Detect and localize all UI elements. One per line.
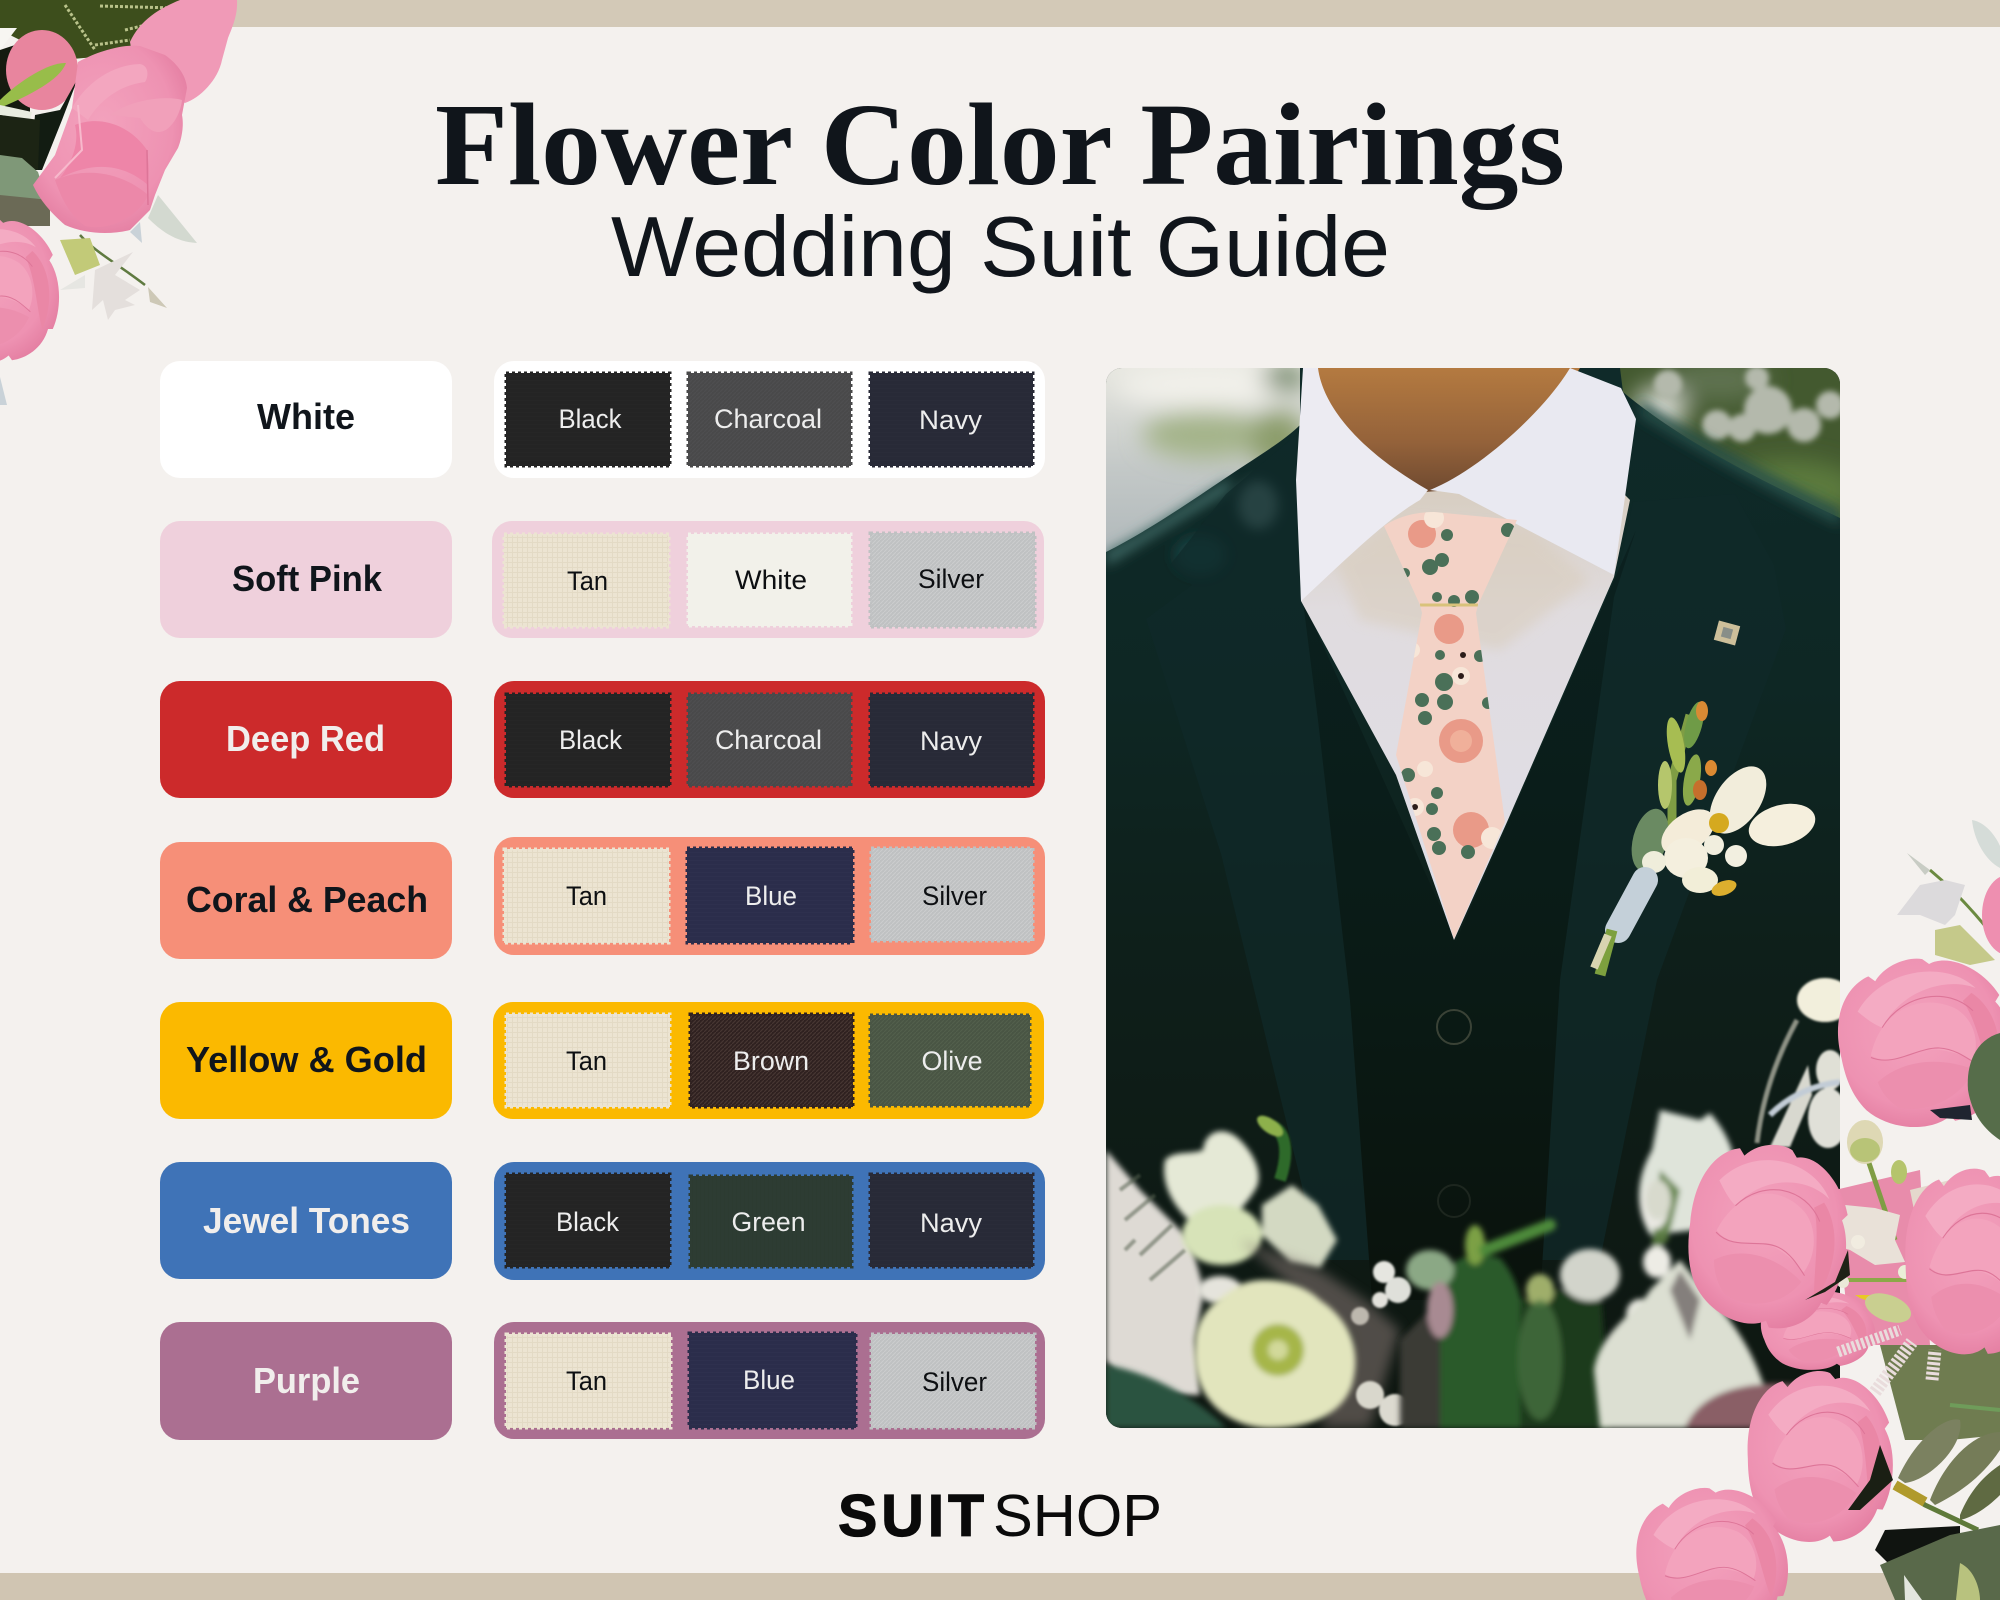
- swatch: White: [688, 534, 851, 626]
- left collar: [1296, 368, 1428, 601]
- dark spiky sepal: [30, 78, 78, 170]
- swatch: Tan: Tan: [566, 881, 607, 911]
- label pill: Purple: Purple: [253, 1360, 360, 1401]
- pink backing behind center blossoms: [1835, 1170, 1930, 1345]
- buds: [1847, 1120, 1907, 1240]
- swatch: Navy: [870, 373, 1033, 466]
- bottom band: [0, 1573, 2000, 1600]
- swatch: Olive: Olive: [922, 1046, 982, 1076]
- jacket: [1106, 368, 1840, 1428]
- photo background: blurred sky and greenery: [1106, 368, 1840, 552]
- label pill: Purple: [160, 1322, 452, 1440]
- swatch: Charcoal: Charcoal: [715, 725, 822, 755]
- swatch: Black: [506, 1174, 670, 1267]
- logo: SUITSHOP: SHOP: [993, 1483, 1162, 1549]
- swatch: Navy: Navy: [920, 1208, 983, 1238]
- swatch: Silver: Silver: [918, 564, 984, 594]
- swatch: Silver: Silver: [922, 881, 987, 911]
- green bud leaf: [0, 63, 66, 108]
- neck: [1312, 368, 1580, 492]
- green foliage center: [1400, 1225, 1620, 1428]
- top fern and greens: [0, 0, 190, 150]
- white fern sprigs: [1838, 1330, 1935, 1392]
- swatch: Navy: [870, 694, 1033, 786]
- logo: SUITSHOP: [838, 1483, 1162, 1549]
- row: Jewel Tones: [160, 1162, 1045, 1280]
- row: Deep Red: [160, 681, 1045, 798]
- sunlit left shoulder highlights: [1106, 400, 1840, 575]
- label pill: Soft Pink: [160, 521, 452, 638]
- row: Soft Pink: [160, 521, 1044, 638]
- boutonniere: [1594, 700, 1820, 975]
- swatch: Tan: [504, 534, 669, 627]
- grey-green leaf: [0, 155, 50, 226]
- label pill: Coral and Peach: Coral & Peach: [186, 879, 428, 920]
- label pill: White: [160, 361, 452, 478]
- left peony: [0, 217, 59, 363]
- swatch: Silver: [871, 1334, 1035, 1428]
- swatch: Brown: Brown: [733, 1046, 809, 1076]
- label pill: Soft Pink: Soft Pink: [232, 558, 383, 599]
- big bottom leaf: [1875, 1525, 2000, 1600]
- swatch: Tan: Tan: [567, 566, 608, 596]
- small white flowers: [1351, 1261, 1411, 1426]
- bud D: [1755, 1286, 1882, 1374]
- swatch panel: Yellow and Gold: [493, 1002, 1044, 1119]
- jacket buttons: [1437, 1010, 1471, 1217]
- floral tie: [1380, 505, 1520, 945]
- large pale green flower: [1195, 1280, 1355, 1428]
- swatch: Charcoal: Charcoal: [714, 404, 822, 434]
- lapel pin: [1714, 620, 1740, 646]
- dark leaf bottom left: [1106, 1365, 1226, 1428]
- white blossoms upper right: [1897, 853, 2000, 965]
- photo: groom in dark green suit with floral tie and bouquet: [1106, 358, 1860, 1428]
- swatch: Green: [690, 1176, 852, 1267]
- white stem piece: [0, 105, 32, 120]
- label pill: Jewel Tones: Jewel Tones: [203, 1200, 410, 1241]
- peony E: [1741, 1364, 1900, 1550]
- flowers: right-side peony cascade: [1631, 820, 2000, 1600]
- small white blossoms: [60, 235, 167, 320]
- label pill: Deep Red: Deep Red: [226, 718, 385, 759]
- lower buds and leaves: [1895, 1405, 2000, 1530]
- dark sepal: [1805, 1250, 1850, 1300]
- swatch: Navy: [870, 1174, 1033, 1267]
- swatch: Tan: [506, 1014, 670, 1107]
- swatch: White: White: [735, 565, 807, 595]
- pink-grey sprays between flowers: [1240, 1240, 1400, 1428]
- swatch: Black: [506, 694, 670, 786]
- peony A: [1832, 951, 2000, 1133]
- flowers: top-left peony cluster: [0, 0, 237, 405]
- dark sepal on peony E: [1848, 1445, 1893, 1510]
- peony F: [1631, 1481, 1794, 1600]
- swatch panel: White: [494, 361, 1045, 478]
- label pill: White: White: [257, 396, 355, 437]
- olive mass below blossoms: [1880, 1345, 2000, 1440]
- swatch: Silver: [871, 848, 1033, 941]
- swatch: Brown: [690, 1014, 853, 1107]
- top band: [0, 0, 2000, 27]
- swatch panel: Jewel Tones: [494, 1162, 1045, 1280]
- leaf right of peony A: [1968, 1033, 2000, 1140]
- upper pale leaf: [1972, 820, 2000, 868]
- tall feather and fern top right of bouquet: [1757, 978, 1853, 1148]
- row: White: [160, 361, 1045, 478]
- right collar: [1430, 368, 1636, 575]
- fern left: [1106, 1150, 1204, 1395]
- swatch: Tan: Tan: [566, 1046, 607, 1076]
- swatch: Tan: [504, 849, 669, 943]
- swatch panel: Coral and Peach: [494, 837, 1045, 955]
- swatch: Blue: [687, 848, 853, 943]
- pale leaves under peony: [0, 195, 197, 405]
- row: Purple: [160, 1322, 1045, 1440]
- swatch: Black: Black: [556, 1207, 619, 1237]
- swatch: Tan: [506, 1334, 671, 1428]
- peony C: [1899, 1161, 2000, 1363]
- swatch: Navy: Navy: [920, 726, 983, 756]
- label pill: Coral and Peach: [160, 842, 452, 959]
- swatch: Blue: [689, 1333, 856, 1428]
- swatch: Navy: Navy: [919, 405, 983, 435]
- swatch: Tan: Tan: [566, 1366, 607, 1396]
- swatch panel: Soft Pink: [492, 521, 1044, 638]
- subtitle: Wedding Suit Guide: [611, 200, 1390, 295]
- far-right pink edge: [1982, 875, 2000, 955]
- main peony: [33, 46, 187, 233]
- swatch: Olive: [870, 1015, 1030, 1106]
- swatch: Silver: Silver: [922, 1367, 987, 1397]
- blurred bouquet: [1106, 978, 1853, 1428]
- white tulip left: [1164, 1131, 1337, 1304]
- white flowers right: [1594, 1110, 1800, 1428]
- swatch: Black: [506, 373, 670, 466]
- right lapel: [1542, 872, 1690, 1260]
- label pill: Deep Red: [160, 681, 452, 798]
- peony B: [1671, 1124, 1866, 1348]
- row: Yellow and Gold: [160, 1002, 1044, 1119]
- white center blossoms: [1833, 1180, 1965, 1328]
- dark shadow under peony A: [1930, 1105, 1972, 1120]
- left lapel: [1176, 476, 1369, 1260]
- title: Flower Color Pairings: [435, 79, 1565, 210]
- swatch: Black: Black: [558, 404, 622, 434]
- shirt collar shadow: [1340, 535, 1584, 650]
- label pill: Yellow and Gold: [160, 1002, 452, 1119]
- label pill: Yellow and Gold: Yellow & Gold: [186, 1039, 427, 1080]
- swatch panel: Deep Red: [494, 681, 1045, 798]
- dark cluster left: [0, 115, 40, 170]
- swatch: Blue: Blue: [743, 1365, 795, 1395]
- row: Coral and Peach: [160, 837, 1045, 959]
- vest: [1303, 530, 1636, 1300]
- swatch: Black: Black: [559, 725, 622, 755]
- swatch: Silver: [870, 533, 1035, 627]
- swatch: Green: Green: [732, 1207, 806, 1237]
- swatch: Blue: Blue: [745, 881, 797, 911]
- green bud sprig: [1254, 1112, 1286, 1180]
- top-right peony: [130, 0, 237, 103]
- small red-pink peony behind: [6, 30, 78, 110]
- swatch panel: Purple: [494, 1322, 1045, 1439]
- shirt: [1298, 470, 1630, 940]
- swatch: Charcoal: [688, 373, 851, 466]
- logo: SUITSHOP: SUIT: [838, 1483, 984, 1549]
- swatch: Charcoal: [688, 694, 851, 786]
- label pill: Jewel Tones: [160, 1162, 452, 1279]
